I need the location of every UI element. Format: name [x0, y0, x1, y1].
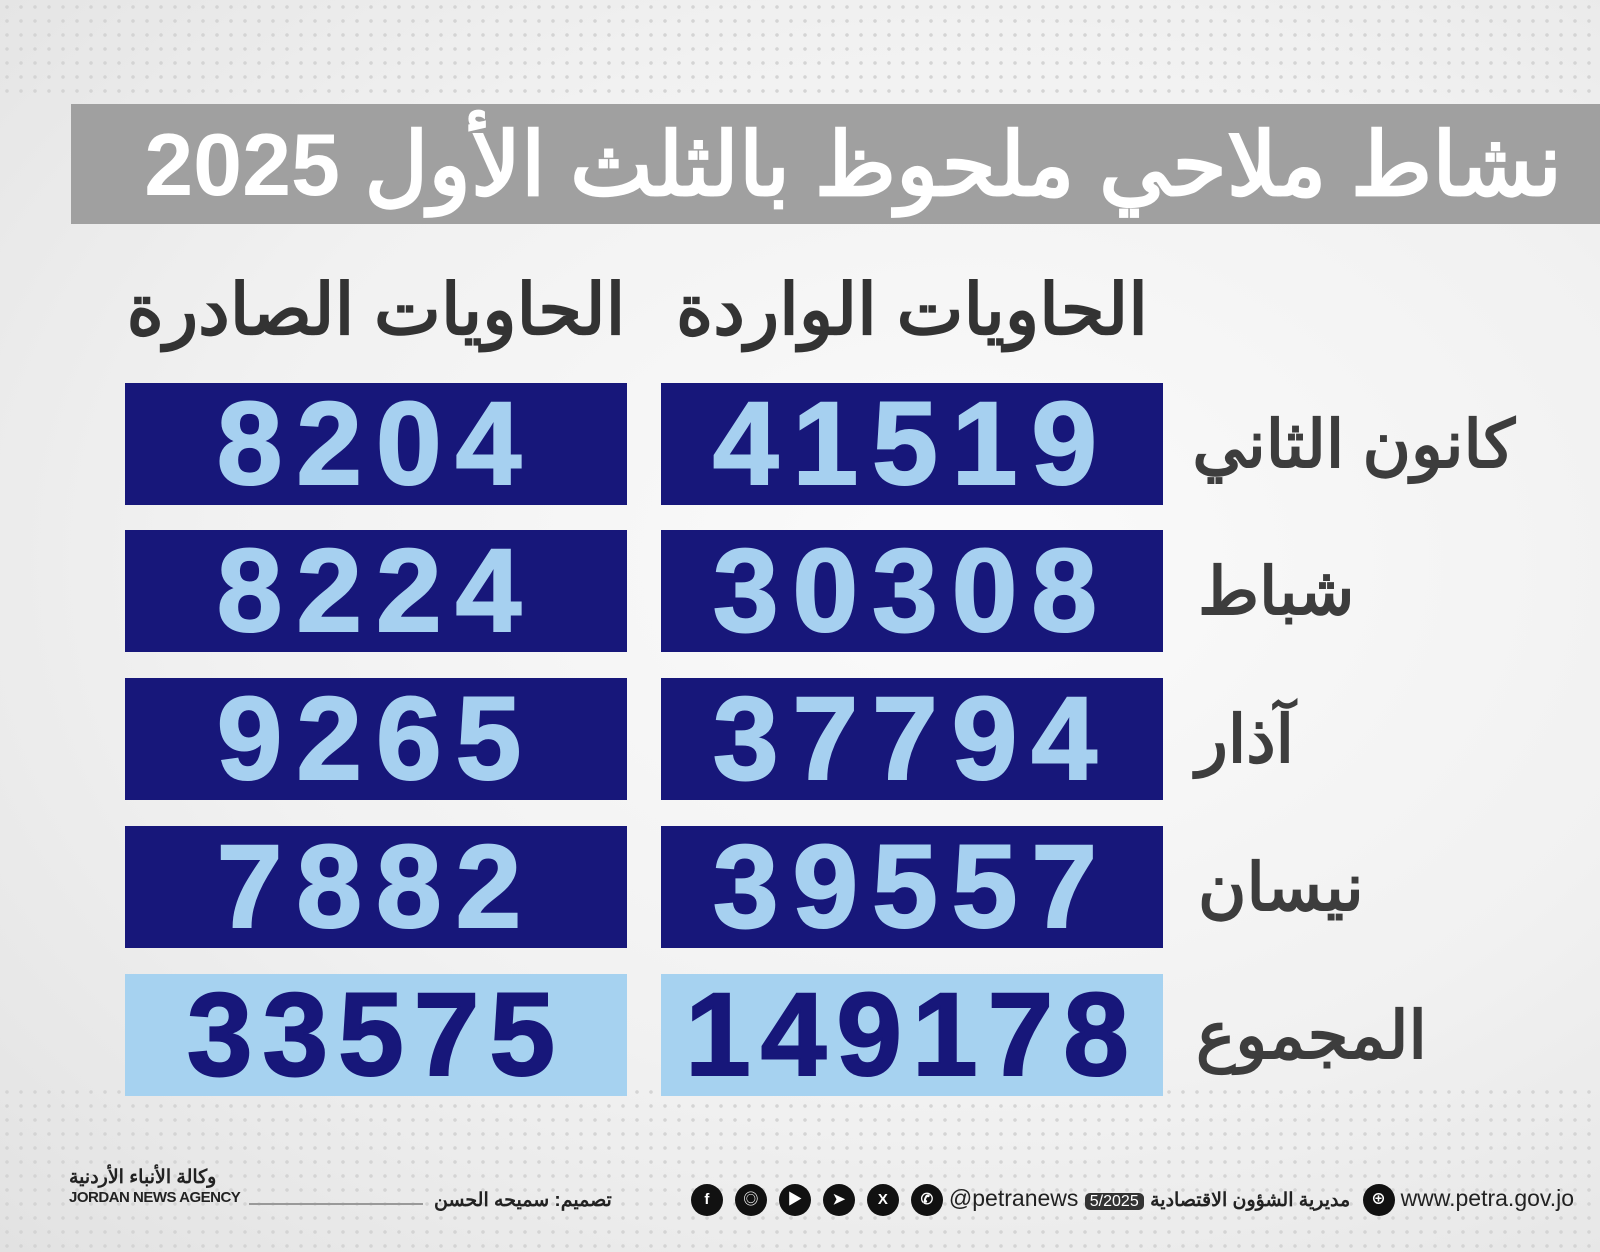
footer credits: ▶ [787, 1191, 802, 1208]
label: total: المجموع [1196, 998, 1427, 1072]
outgoing Apr [125, 826, 627, 948]
outgoing Jan: 8204 [217, 378, 535, 510]
footer credits: ⊕ [1371, 1191, 1386, 1208]
title bar: نشاط ملاحي ملحوظ بالثلث الأول 2025 [144, 114, 1562, 214]
footer credits: ➤ [833, 1191, 845, 1208]
incoming Apr: 39557 [713, 821, 1111, 953]
outgoing Jan [125, 383, 627, 505]
footer credits [434, 1184, 1574, 1216]
label: January: كانون الثاني [1192, 406, 1515, 480]
label: April: نيسان [1198, 850, 1364, 924]
incoming Feb: 30308 [713, 525, 1111, 657]
outgoing total: 33575 [187, 969, 565, 1101]
label: February: شباط [1198, 554, 1354, 628]
outgoing Feb: 8224 [217, 525, 535, 657]
outgoing Mar: 9265 [217, 673, 535, 805]
footer credits: f [704, 1191, 709, 1208]
footer credits: ◎ [743, 1191, 758, 1208]
outgoing Apr: 7882 [217, 821, 535, 953]
row: February [125, 525, 1354, 657]
row: total [125, 969, 1427, 1101]
footer credits: X [878, 1191, 888, 1208]
footer credits: ✆ [921, 1191, 933, 1208]
row: January [125, 378, 1516, 510]
label: March: آذار [1196, 702, 1294, 776]
incoming Jan: 41519 [713, 378, 1111, 510]
footer credits: تصميم: سميحه الحسن [434, 1190, 612, 1210]
header: outgoing: الحاويات الصادرة [127, 271, 625, 350]
footer logo [69, 1164, 240, 1206]
incoming total: 149178 [685, 969, 1139, 1101]
row: April [125, 821, 1364, 953]
outgoing Mar [125, 678, 627, 800]
footer logo: وكالة الأنباء الأردنية [69, 1167, 216, 1188]
footer credits: @petranews 5/2025 مديرية الشؤون الاقتصادية www.petra.gov.jo [949, 1185, 1574, 1211]
row: March [125, 673, 1298, 805]
incoming Mar: 37794 [713, 673, 1111, 805]
header: incoming: الحاويات الواردة [676, 271, 1148, 350]
outgoing Feb [125, 530, 627, 652]
footer logo: JORDAN NEWS AGENCY [69, 1189, 240, 1206]
